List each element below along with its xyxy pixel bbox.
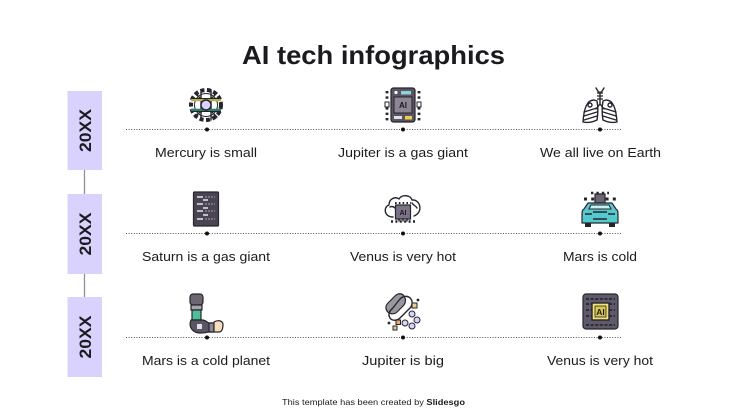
icon: AI tablet [385, 88, 421, 122]
icon: AI chip [583, 294, 618, 329]
icon: lungs [583, 88, 617, 122]
year tag: row 3 [68, 297, 102, 377]
icon: robotic arm [190, 294, 223, 333]
label: Mercury is small: Mercury is small [155, 145, 257, 160]
label: Mars is a cold planet: Mars is a cold planet [142, 353, 270, 368]
footer credit: This template has been created by Slidesgo [282, 397, 465, 407]
dotted line: row 3 [126, 336, 621, 340]
icon: server panel [194, 192, 218, 226]
year tag: row 2: 20XX [76, 212, 95, 256]
dotted line: row 1 [126, 128, 621, 132]
label: Venus is very hot (row 2): Venus is very hot [350, 249, 456, 264]
label: Venus is very hot (row 3): Venus is very hot [547, 353, 653, 368]
label: Mars is cold: Mars is cold [563, 249, 637, 264]
icon: AI tablet: AI [399, 101, 407, 110]
label: Jupiter is a gas giant: Jupiter is a gas giant [338, 145, 468, 160]
label: Saturn is a gas giant: Saturn is a gas giant [142, 249, 270, 264]
icon: AI car [582, 193, 618, 227]
timeline connectors [84, 170, 86, 297]
icon: AI chip: AI [596, 307, 605, 317]
year tag: row 2 [68, 194, 102, 274]
year tag: row 1: 20XX [76, 108, 95, 152]
icon: AI cloud [385, 196, 420, 222]
icon: molecule and capsules [386, 294, 420, 330]
dotted line: row 2 [126, 232, 621, 236]
icon: AI cloud: AI [400, 210, 407, 217]
year tag: row 1 [68, 91, 102, 170]
title: AI tech infographics [242, 40, 505, 70]
label: We all live on Earth: We all live on Earth [540, 145, 661, 160]
year tag: row 3: 20XX [76, 315, 95, 358]
icon: circuit gear [191, 90, 221, 120]
label: Jupiter is big: Jupiter is big [362, 353, 444, 368]
